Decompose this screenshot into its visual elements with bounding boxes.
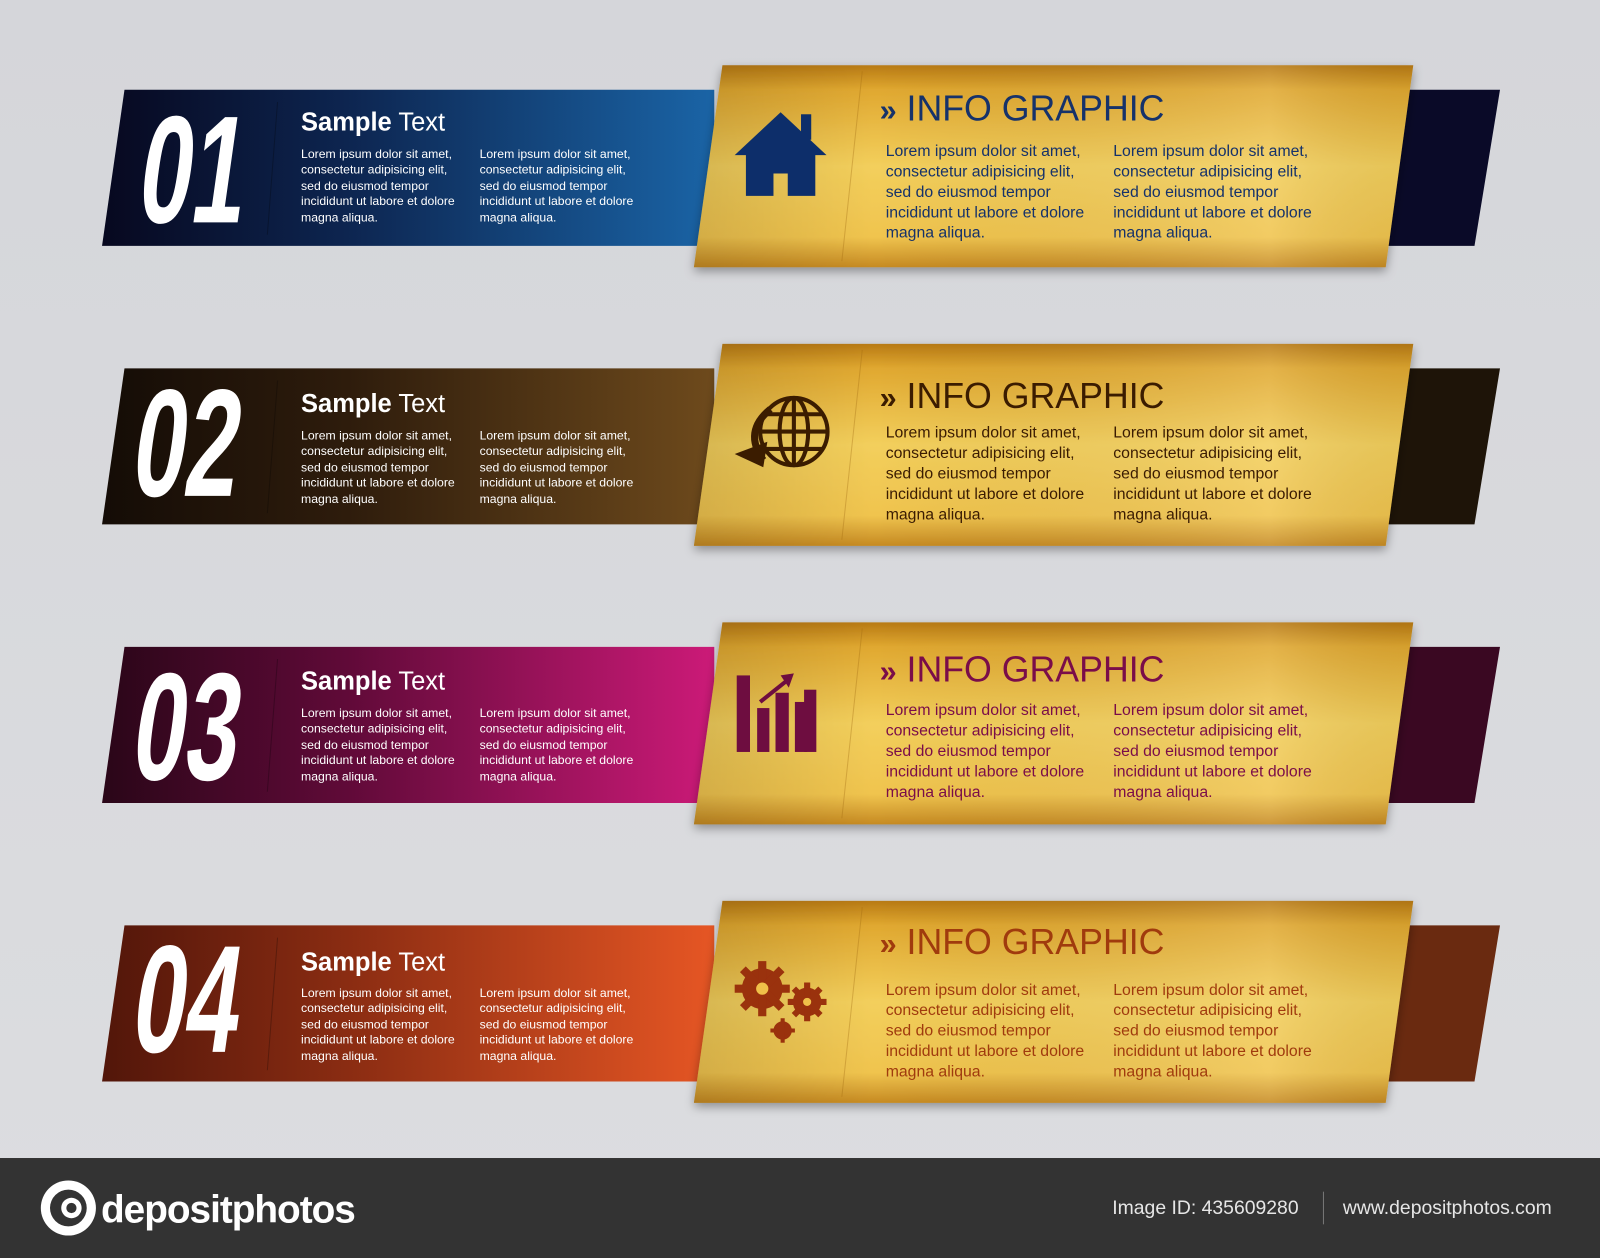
gold panel 3: incididunt ut labore et dolore — [886, 763, 1084, 780]
left band 4: Sample Text — [301, 948, 445, 976]
left band 2 — [102, 359, 714, 529]
left band 2: magna aliqua. — [301, 492, 378, 506]
gold panel 3: consectetur adipisicing elit, — [886, 723, 1075, 740]
gold panel 2: consectetur adipisicing elit, — [886, 445, 1075, 462]
row 4 — [102, 901, 1500, 1103]
left band 4: consectetur adipisicing elit, — [301, 1001, 447, 1015]
gold panel 3: sed do eiusmod tempor — [1113, 743, 1278, 760]
left band 3: sed do eiusmod tempor — [301, 738, 429, 752]
gold panel 3: magna aliqua. — [886, 784, 985, 801]
left band 3: sed do eiusmod tempor — [480, 738, 607, 752]
gold panel 4 — [694, 901, 1413, 1103]
gold panel 1: Lorem ipsum dolor sit amet, — [1113, 143, 1308, 160]
gold panel 2 — [694, 344, 1413, 546]
left band 1 — [102, 85, 714, 256]
left band 3: Lorem ipsum dolor sit amet, — [480, 706, 631, 720]
left band 4: magna aliqua. — [301, 1049, 378, 1063]
gold panel 3: Lorem ipsum dolor sit amet, — [1113, 702, 1308, 719]
heading 3: » INFO GRAPHIC — [880, 650, 1164, 690]
footer: Image ID: 435609280 — [1112, 1197, 1299, 1219]
gold panel 2: incididunt ut labore et dolore — [886, 486, 1084, 503]
row 2 — [102, 344, 1500, 546]
gold panel 4: consectetur adipisicing elit, — [1113, 1002, 1302, 1019]
left band 1: consectetur adipisicing elit, — [301, 162, 447, 176]
left band 2: sed do eiusmod tempor — [480, 460, 607, 474]
right band 2 — [1388, 368, 1500, 524]
left band 1: 01 — [130, 85, 260, 256]
left band 3: 03 — [124, 642, 253, 813]
row 3 — [102, 622, 1500, 824]
left band 4: sed do eiusmod tempor — [301, 1017, 429, 1031]
gold panel 2: incididunt ut labore et dolore — [1113, 486, 1312, 503]
left band 2: consectetur adipisicing elit, — [301, 444, 447, 458]
left band 3: Lorem ipsum dolor sit amet, — [301, 706, 452, 720]
left band 1: Lorem ipsum dolor sit amet, — [480, 147, 631, 161]
left band 4 — [102, 915, 714, 1085]
left band 4: Lorem ipsum dolor sit amet, — [480, 986, 631, 1000]
gold panel 1: incididunt ut labore et dolore — [1113, 204, 1312, 221]
left band 3: consectetur adipisicing elit, — [480, 722, 626, 736]
left band 4: incididunt ut labore et dolore — [301, 1033, 455, 1047]
gold panel 3: magna aliqua. — [1113, 784, 1213, 801]
left band 3: incididunt ut labore et dolore — [480, 753, 634, 767]
left band 1: consectetur adipisicing elit, — [480, 162, 626, 176]
gold panel 1 — [694, 65, 1413, 267]
left band 1: incididunt ut labore et dolore — [301, 194, 455, 208]
heading 4: » INFO GRAPHIC — [880, 922, 1164, 962]
left band 2: consectetur adipisicing elit, — [480, 444, 626, 458]
gold panel 1: Lorem ipsum dolor sit amet, — [886, 143, 1081, 160]
right band 3 — [1388, 647, 1500, 803]
gold panel 2: Lorem ipsum dolor sit amet, — [1113, 425, 1308, 442]
gold panel 1: incididunt ut labore et dolore — [886, 204, 1084, 221]
right band 4 — [1388, 925, 1500, 1081]
icon: gears — [735, 961, 827, 1043]
row 1 — [102, 65, 1500, 267]
gold panel 1: magna aliqua. — [1113, 225, 1213, 242]
gold panel 3: Lorem ipsum dolor sit amet, — [886, 702, 1081, 719]
left band 3: Sample Text — [301, 668, 445, 696]
left band 2: Lorem ipsum dolor sit amet, — [301, 429, 452, 443]
left band 4: incididunt ut labore et dolore — [480, 1033, 634, 1047]
gold panel 2: Lorem ipsum dolor sit amet, — [886, 425, 1081, 442]
gold panel 3: consectetur adipisicing elit, — [1113, 723, 1302, 740]
left band 3: incididunt ut labore et dolore — [301, 753, 455, 767]
gold panel 4: Lorem ipsum dolor sit amet, — [886, 982, 1081, 999]
icon: bar chart — [737, 673, 816, 752]
left band 2: incididunt ut labore et dolore — [301, 476, 455, 490]
heading 2: » INFO GRAPHIC — [880, 376, 1164, 416]
left band 1: Sample Text — [301, 109, 445, 137]
gold panel 1: consectetur adipisicing elit, — [1113, 164, 1302, 181]
gold panel 4: sed do eiusmod tempor — [1113, 1023, 1278, 1040]
left band 4: magna aliqua. — [480, 1049, 556, 1063]
left band 1: magna aliqua. — [480, 210, 556, 224]
gold panel 3 — [694, 622, 1413, 824]
right band 1 — [1388, 90, 1500, 246]
gold panel 2: sed do eiusmod tempor — [886, 466, 1051, 483]
icon: camera logo — [41, 1180, 96, 1236]
gold panel 1: sed do eiusmod tempor — [886, 184, 1051, 201]
footer: depositphotos — [101, 1188, 355, 1231]
gold panel 4: sed do eiusmod tempor — [886, 1023, 1051, 1040]
left band 3 — [102, 642, 714, 813]
left band 1: magna aliqua. — [301, 210, 378, 224]
gold panel 4: incididunt ut labore et dolore — [1113, 1043, 1312, 1060]
heading 1: » INFO GRAPHIC — [880, 88, 1164, 128]
gold panel 3: incididunt ut labore et dolore — [1113, 763, 1312, 780]
left band 2: sed do eiusmod tempor — [301, 460, 429, 474]
gold panel 4: Lorem ipsum dolor sit amet, — [1113, 982, 1308, 999]
footer — [0, 1158, 1600, 1258]
gold panel 2: magna aliqua. — [886, 506, 985, 523]
left band 3: magna aliqua. — [480, 770, 556, 784]
icon: globe — [735, 398, 828, 467]
footer: www.depositphotos.com — [1342, 1197, 1552, 1219]
left band 3: magna aliqua. — [301, 770, 378, 784]
left band 2: Lorem ipsum dolor sit amet, — [480, 429, 631, 443]
gold panel 4: incididunt ut labore et dolore — [886, 1043, 1084, 1060]
gold panel 3: sed do eiusmod tempor — [886, 743, 1051, 760]
left band 4: 04 — [124, 915, 253, 1085]
gold panel 1: magna aliqua. — [886, 225, 985, 242]
gold panel 1: consectetur adipisicing elit, — [886, 164, 1075, 181]
left band 2: Sample Text — [301, 390, 445, 418]
left band 2: incididunt ut labore et dolore — [480, 476, 634, 490]
left band 1: Lorem ipsum dolor sit amet, — [301, 147, 452, 161]
left band 4: consectetur adipisicing elit, — [480, 1001, 626, 1015]
left band 1: sed do eiusmod tempor — [301, 179, 429, 193]
left band 2: 02 — [124, 359, 253, 529]
gold panel 4: magna aliqua. — [1113, 1063, 1213, 1080]
icon: house — [735, 112, 827, 196]
left band 1: sed do eiusmod tempor — [480, 179, 607, 193]
gold panel 2: consectetur adipisicing elit, — [1113, 445, 1302, 462]
left band 3: consectetur adipisicing elit, — [301, 722, 447, 736]
left band 4: sed do eiusmod tempor — [480, 1017, 607, 1031]
left band 1: incididunt ut labore et dolore — [480, 194, 634, 208]
left band 2: magna aliqua. — [480, 492, 556, 506]
gold panel 1: sed do eiusmod tempor — [1113, 184, 1278, 201]
gold panel 4: magna aliqua. — [886, 1063, 985, 1080]
left band 4: Lorem ipsum dolor sit amet, — [301, 986, 452, 1000]
gold panel 4: consectetur adipisicing elit, — [886, 1002, 1075, 1019]
gold panel 2: magna aliqua. — [1113, 506, 1213, 523]
gold panel 2: sed do eiusmod tempor — [1113, 466, 1278, 483]
